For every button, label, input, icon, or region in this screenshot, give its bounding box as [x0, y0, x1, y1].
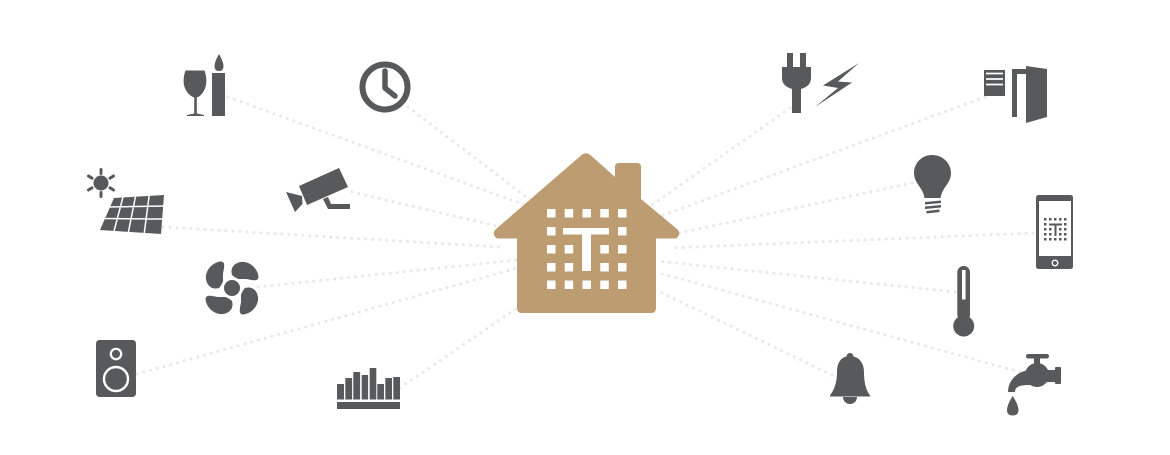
icon: water tap with drop [1007, 354, 1061, 416]
icon: analog clock [362, 64, 408, 110]
central house with T logo [494, 153, 679, 313]
logo: window grid [547, 209, 626, 289]
icon: door with notice panel [984, 66, 1047, 123]
icon: ventilation fan [206, 262, 258, 314]
icon: thermometer [953, 266, 974, 336]
icon: smartphone with T logo [1036, 195, 1073, 269]
icon: sun and solar panel [88, 170, 165, 235]
logo: letter T shape [563, 228, 609, 271]
notice panel [984, 70, 1005, 96]
open door [1012, 69, 1027, 117]
icon: bar chart [337, 368, 400, 409]
icon: loudspeaker [96, 340, 136, 397]
icon: security camera [286, 168, 350, 212]
sun [88, 170, 114, 196]
icon: light bulb [914, 155, 951, 214]
mini logo grid [1044, 218, 1066, 240]
icon: alarm bell [830, 353, 870, 404]
dotted connectors from house to devices [137, 97, 1033, 388]
icon: power plug and lightning bolt [782, 53, 859, 113]
solar panel grid [100, 193, 165, 235]
icon: wine glass and candle [184, 54, 225, 116]
